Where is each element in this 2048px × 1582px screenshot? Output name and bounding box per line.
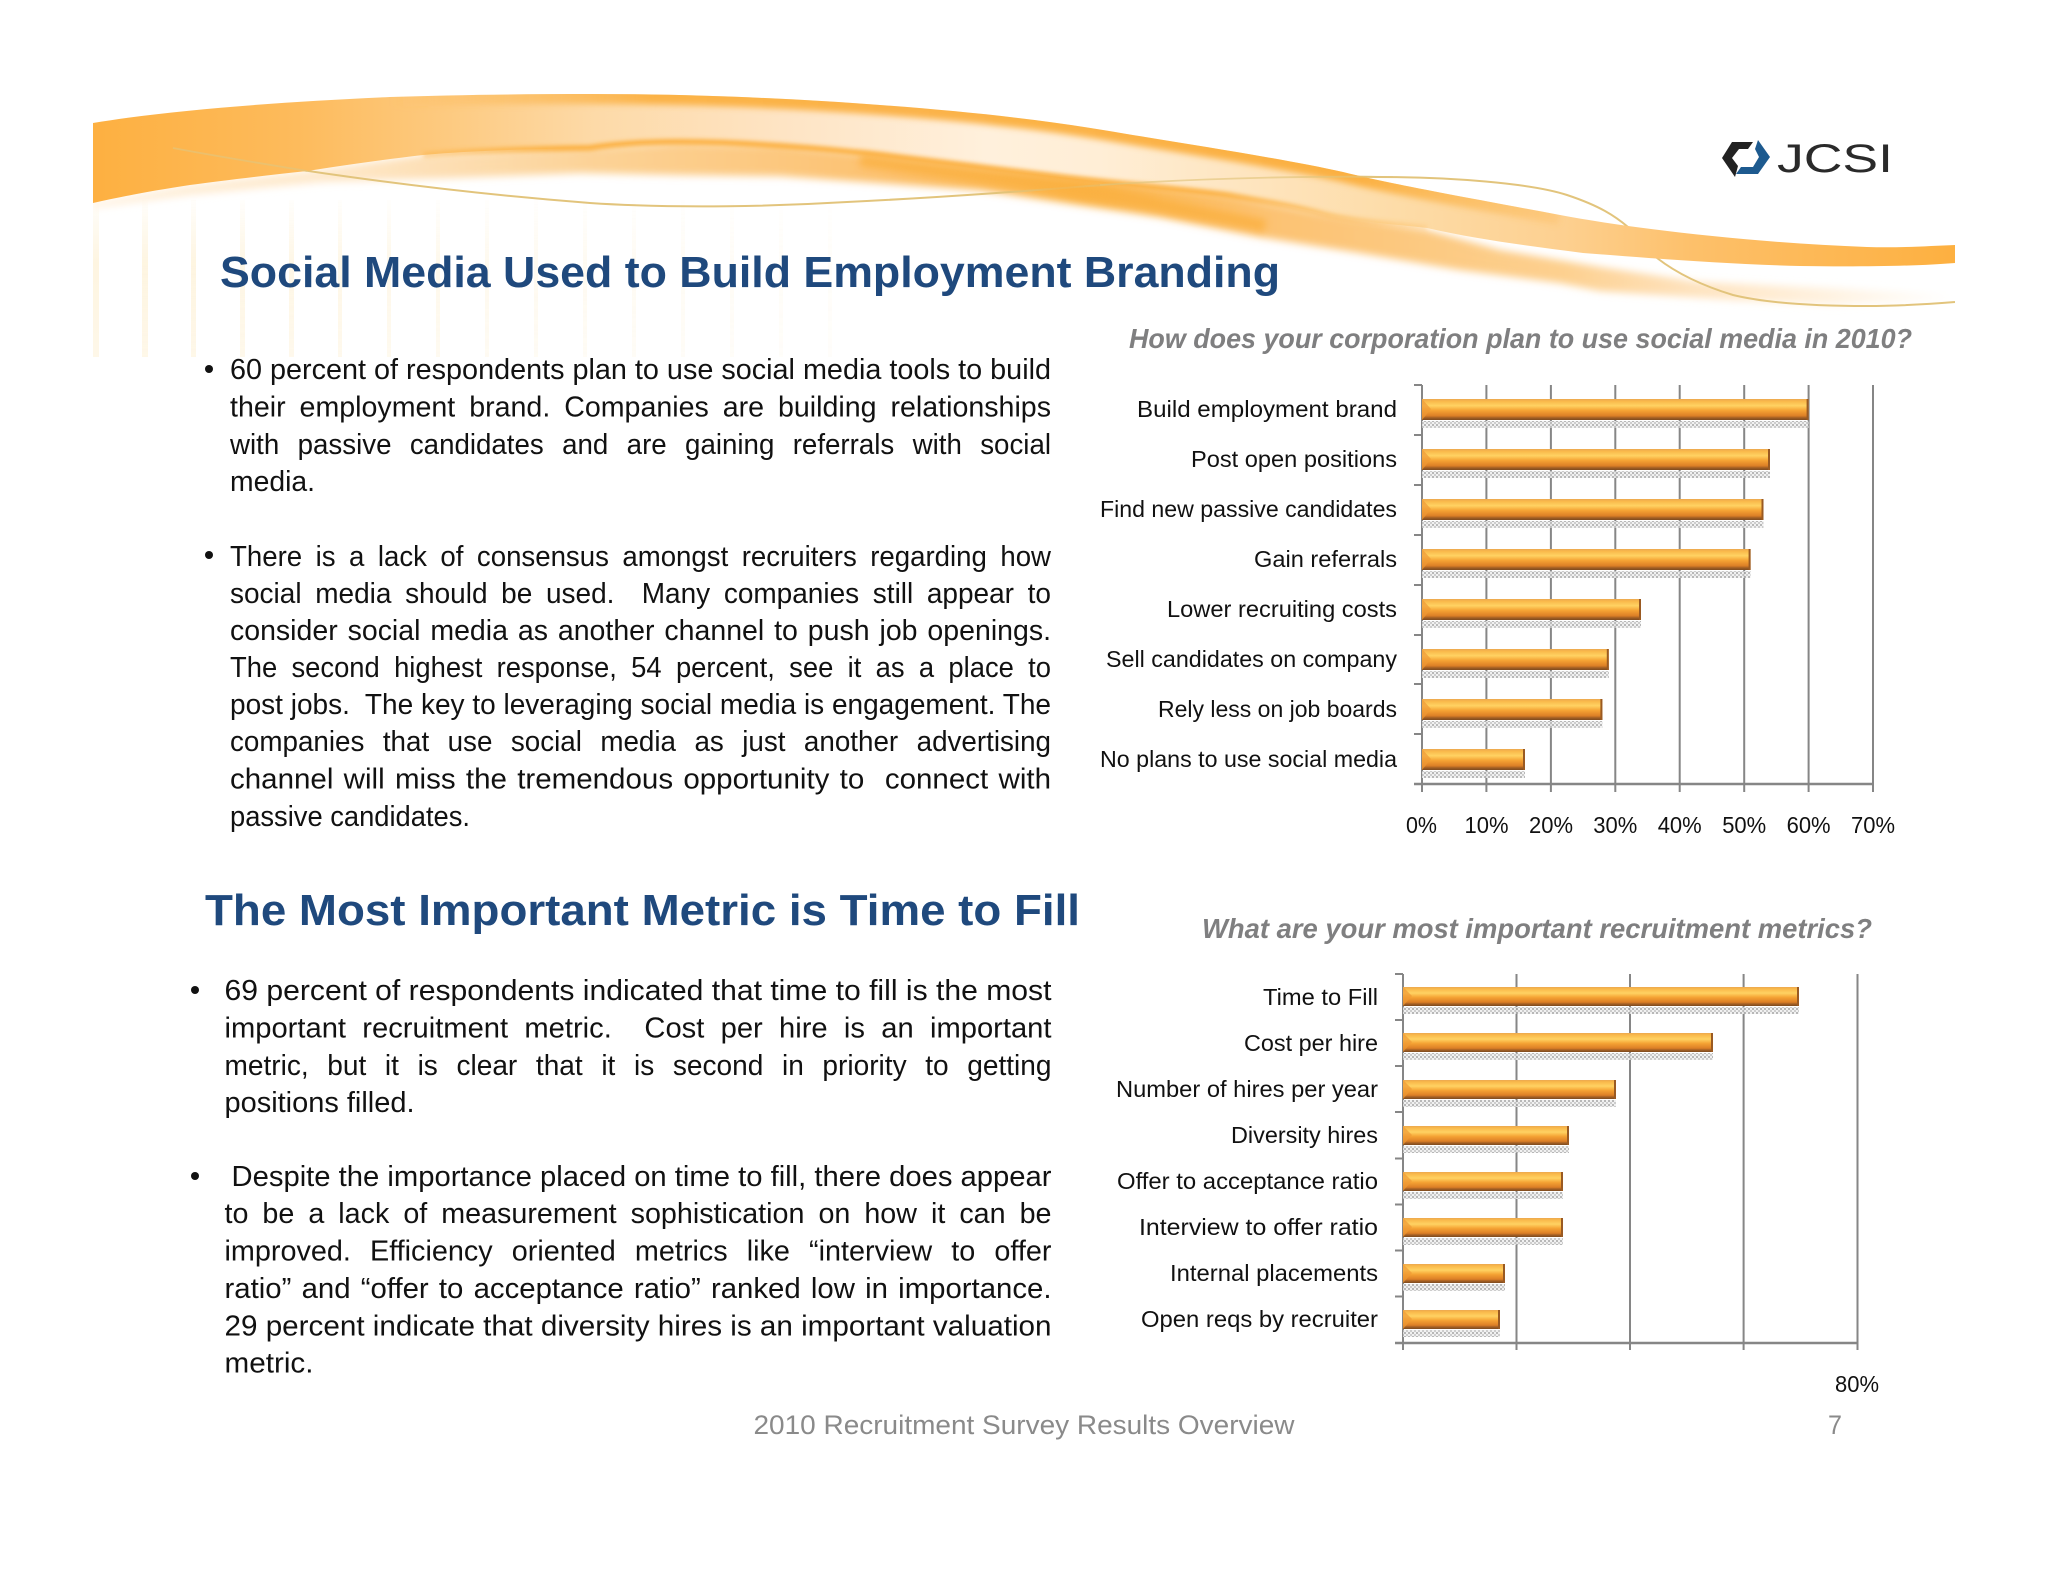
category labels: Number of hires per year xyxy=(1116,1076,1378,1102)
text block: social media bullets: social media should be used. Many companies still appear to xyxy=(230,578,1051,610)
category labels: Build employment brand xyxy=(1137,396,1397,422)
category labels: Find new passive candidates xyxy=(1100,496,1397,522)
axis labels: 70% xyxy=(1851,812,1895,838)
text block: metric bullets: to be a lack of measurement sophistication on how it can be xyxy=(224,1198,1052,1230)
axis labels: 30% xyxy=(1593,812,1637,838)
category labels: Rely less on job boards xyxy=(1158,696,1397,722)
logo wordmark: JCSI xyxy=(1777,137,1893,181)
category labels: No plans to use social media xyxy=(1100,746,1397,772)
chart heading: metrics question: What are your most important recruitment metrics? xyxy=(1202,913,1872,944)
bars xyxy=(1422,399,1809,778)
page number: 7 xyxy=(1828,1410,1842,1440)
category labels: Post open positions xyxy=(1191,446,1397,472)
text block: social media bullets: There is a lack of consensus amongst recruiters regarding how xyxy=(230,541,1051,573)
text block: social media bullets: media. xyxy=(230,466,315,498)
axis labels: 50% xyxy=(1722,812,1766,838)
text block: metric bullets: ratio” and “offer to acceptance ratio” ranked low in importance. xyxy=(224,1273,1052,1305)
text block: metric bullets xyxy=(191,975,1052,1380)
text block: metric bullets: positions filled. xyxy=(224,1087,414,1119)
wave central ridge xyxy=(423,142,1427,228)
text block: metric bullets: 69 percent of respondents indicated that time to fill is the most xyxy=(224,975,1052,1007)
text block: metric bullets: 29 percent indicate that diversity hires is an important valuation xyxy=(224,1310,1052,1342)
vertical stripes xyxy=(93,209,734,357)
bullet xyxy=(191,1172,199,1180)
text block: metric bullets: metric, but it is clear that it is second in priority to getting xyxy=(224,1050,1052,1082)
title: Most Important Metric: The Most Important Metric is Time to Fill xyxy=(205,886,1080,935)
category labels xyxy=(1100,396,1397,772)
header wave banner xyxy=(93,94,1955,357)
wave lower streak xyxy=(860,160,1265,226)
text block: social media bullets: companies that use social media as just another advertising xyxy=(230,726,1051,758)
wave lower pale band xyxy=(93,143,1955,305)
text block: social media bullets: The second highest response, 54 percent, see it as a place to xyxy=(230,652,1051,684)
text block: social media bullets: channel will miss the tremendous opportunity to connect with xyxy=(230,764,1051,796)
axis labels: 20% xyxy=(1529,812,1573,838)
category labels xyxy=(1116,984,1378,1332)
axis labels: 0% xyxy=(1406,812,1437,838)
axis labels: 40% xyxy=(1658,812,1702,838)
axis labels: 60% xyxy=(1787,812,1831,838)
axis label: 80%: 80% xyxy=(1835,1371,1879,1397)
logo: JCSI xyxy=(1722,137,1893,181)
text block: metric bullets: improved. Efficiency oriented metrics like “interview to offer xyxy=(224,1236,1052,1268)
axis labels xyxy=(1406,812,1895,838)
text block: social media bullets xyxy=(205,354,1051,833)
category labels: Open reqs by recruiter xyxy=(1141,1306,1378,1332)
text block: social media bullets: with passive candidates and are gaining referrals with social xyxy=(229,429,1051,461)
text block: social media bullets: consider social media as another channel to push job openings. xyxy=(230,615,1051,647)
wave thin line xyxy=(304,170,1955,307)
category labels: Lower recruiting costs xyxy=(1167,596,1397,622)
bullet xyxy=(205,365,213,373)
text block: social media bullets: passive candidates. xyxy=(230,801,470,833)
category labels: Interview to offer ratio xyxy=(1139,1214,1378,1240)
axis labels: 10% xyxy=(1464,812,1508,838)
text block: metric bullets: metric. xyxy=(224,1348,314,1380)
gridlines and axes xyxy=(1414,385,1873,792)
text block: social media bullets: post jobs. The key to leveraging social media is engagement. The xyxy=(230,689,1051,721)
bars xyxy=(1403,987,1799,1337)
gridlines and axes xyxy=(1395,974,1858,1350)
chart heading: social media question: How does your corporation plan to use social media in 2010? xyxy=(1129,323,1912,354)
category labels: Diversity hires xyxy=(1231,1122,1378,1148)
category labels: Internal placements xyxy=(1170,1260,1378,1286)
logo mark xyxy=(1722,140,1770,177)
bar chart: social media plans xyxy=(1100,385,1895,838)
text block: social media bullets: their employment brand. Companies are building relationships xyxy=(230,392,1051,424)
category labels: Gain referrals xyxy=(1254,546,1397,572)
category labels: Time to Fill xyxy=(1263,984,1378,1010)
title: Social Media: Social Media Used to Build Employment Branding xyxy=(220,248,1280,297)
text block: metric bullets: Despite the importance placed on time to fill, there does appear xyxy=(232,1161,1052,1193)
category labels: Sell candidates on company xyxy=(1106,646,1397,672)
category labels: Cost per hire xyxy=(1244,1030,1378,1056)
category labels: Offer to acceptance ratio xyxy=(1117,1168,1378,1194)
wave main band xyxy=(93,94,1955,266)
wave top edge glow xyxy=(390,94,1560,215)
bar chart: recruitment metrics xyxy=(1116,974,1879,1397)
footer text: 2010 Recruitment Survey Results Overview xyxy=(754,1410,1295,1440)
bullet xyxy=(205,551,213,559)
wave line overlay xyxy=(173,148,1393,185)
text block: social media bullets: 60 percent of respondents plan to use social media tools to build xyxy=(230,354,1051,386)
bullet xyxy=(191,986,199,994)
text block: metric bullets: important recruitment metric. Cost per hire is an important xyxy=(224,1012,1052,1044)
